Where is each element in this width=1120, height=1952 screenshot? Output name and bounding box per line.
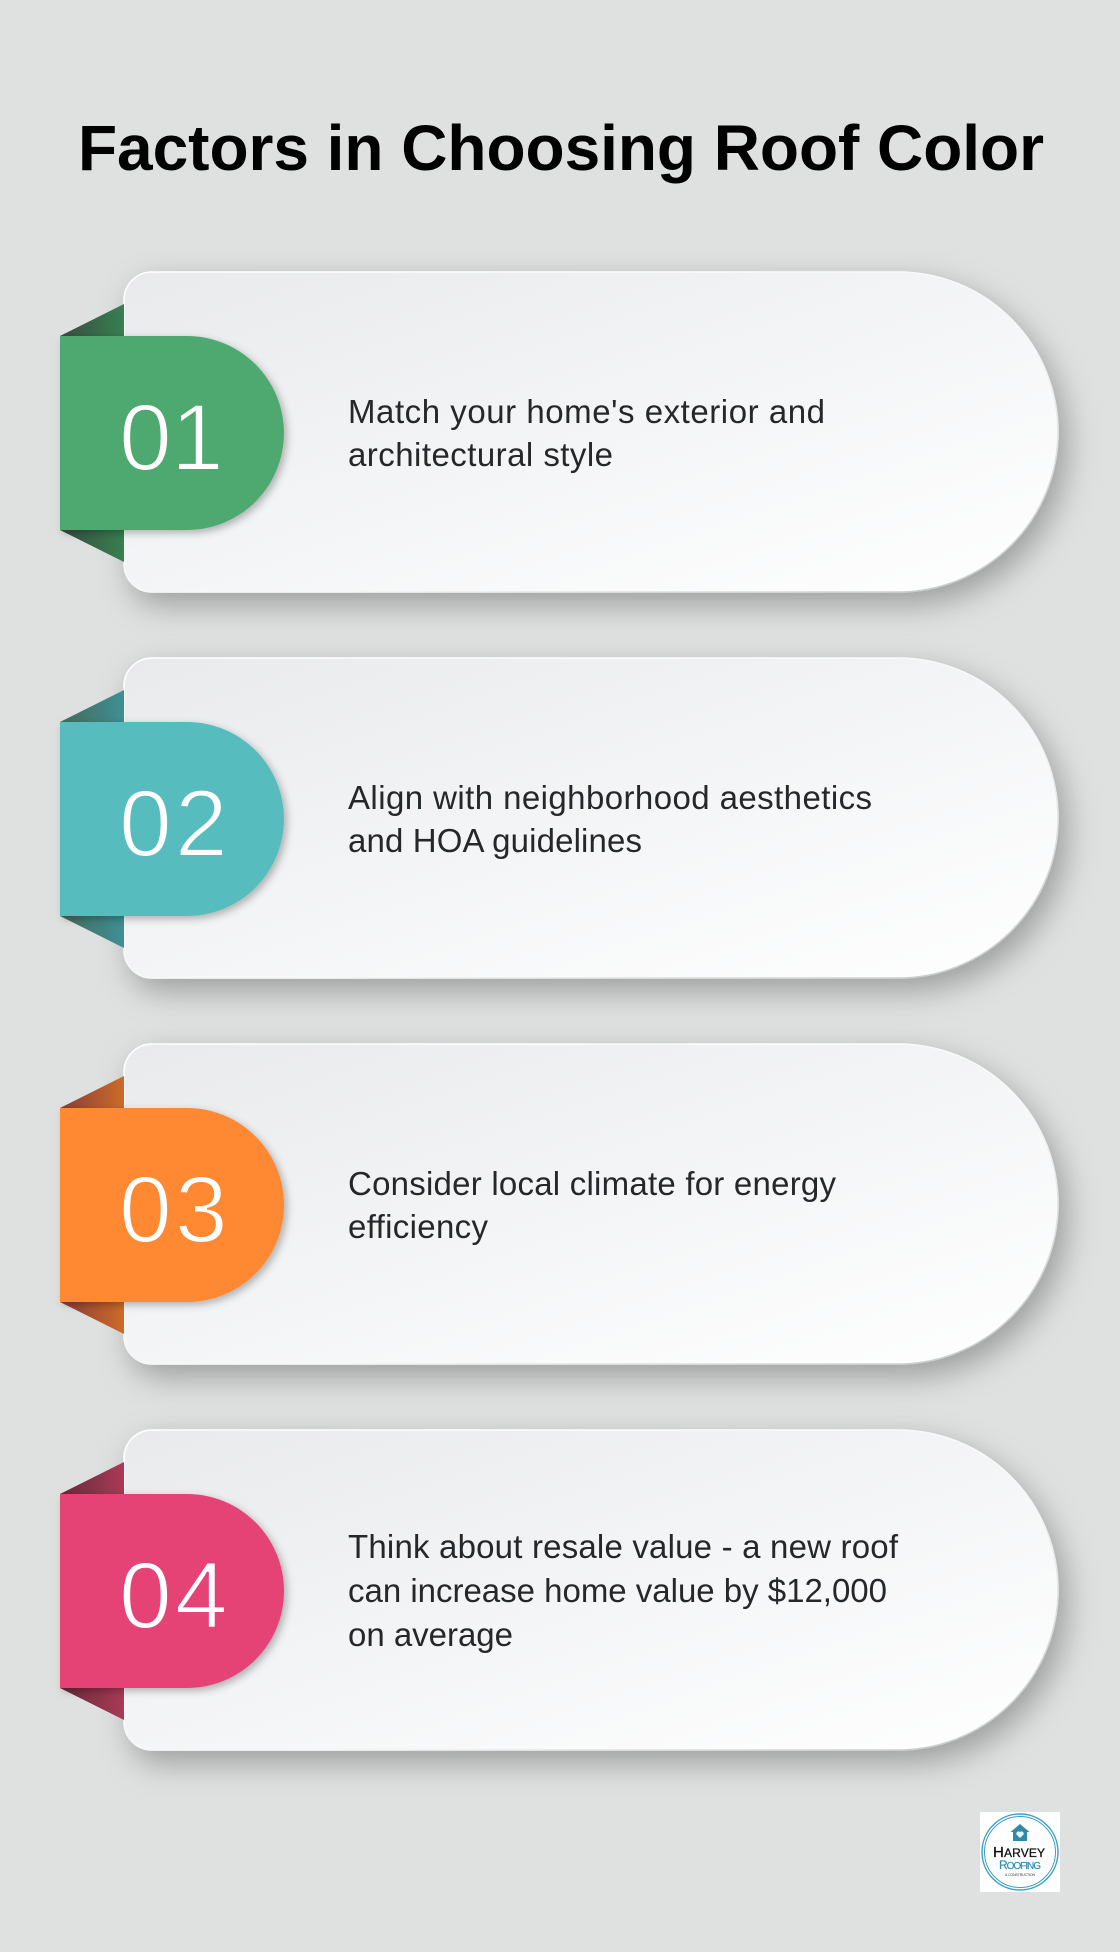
ribbon fold bottom 04: [60, 1688, 124, 1720]
text 03: [348, 1165, 836, 1245]
number 02: 02: [119, 771, 231, 877]
panel: factor 01: [60, 272, 1058, 592]
panel: factor 03: [60, 1044, 1058, 1364]
text 03: efficiency: [348, 1208, 488, 1245]
icon: house with heart: [1010, 1824, 1030, 1841]
card 03: [124, 1044, 1058, 1364]
text 04: [348, 1528, 899, 1653]
text 04: Think about resale value - a new roof: [348, 1528, 899, 1565]
ribbon fold bottom 02: [60, 916, 124, 948]
text 01: [348, 393, 825, 473]
logo: Harvey Roofing: HARVEY: [993, 1844, 1045, 1861]
number badge 04: [60, 1494, 284, 1688]
panel: factor 02: [60, 658, 1058, 978]
text 02: [348, 779, 872, 859]
text 02: Align with neighborhood aesthetics: [348, 779, 872, 816]
ribbon fold top 02: [60, 690, 124, 722]
logo: Harvey Roofing: ROOFING: [999, 1858, 1041, 1872]
number 03: 03: [119, 1157, 231, 1263]
text 04: on average: [348, 1616, 513, 1653]
panel: factor 04: [60, 1430, 1058, 1750]
number badge 02: [60, 722, 284, 916]
text 02: and HOA guidelines: [348, 822, 642, 859]
text 01: architectural style: [348, 436, 613, 473]
logo: Harvey Roofing: & CONSTRUCTION: [1005, 1873, 1035, 1877]
card 02: [124, 658, 1058, 978]
ribbon fold bottom 03: [60, 1302, 124, 1334]
ribbon fold top 04: [60, 1462, 124, 1494]
number badge 01: [60, 336, 284, 530]
card 04: [124, 1430, 1058, 1750]
text 04: can increase home value by $12,000: [348, 1572, 887, 1609]
number badge 03: [60, 1108, 284, 1302]
ribbon fold top 01: [60, 304, 124, 336]
ribbon fold top 03: [60, 1076, 124, 1108]
card 01: [124, 272, 1058, 592]
text 01: Match your home's exterior and: [348, 393, 825, 430]
number 04: 04: [119, 1543, 231, 1649]
logo: Harvey Roofing: [980, 1812, 1060, 1892]
number 01: 01: [119, 385, 223, 491]
title: Factors in Choosing Roof Color: [78, 112, 1044, 184]
ribbon fold bottom 01: [60, 530, 124, 562]
text 03: Consider local climate for energy: [348, 1165, 836, 1202]
